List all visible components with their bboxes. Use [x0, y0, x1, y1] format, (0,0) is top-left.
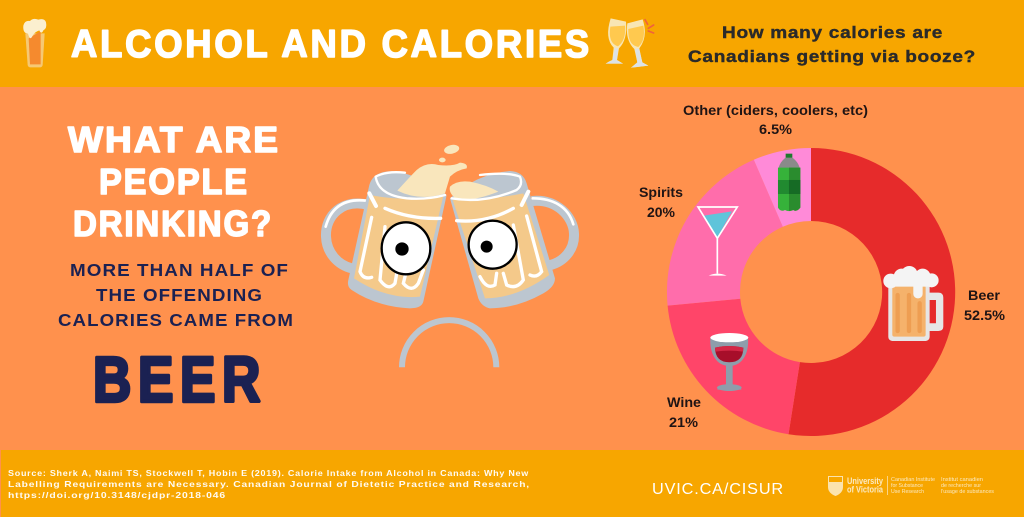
text block: more than half: THE OFFENDING [96, 285, 263, 305]
slice: beer 52.5% [788, 148, 955, 436]
panel: footer band [1, 450, 1024, 517]
logo: University of Victoria [828, 476, 994, 496]
logo: University of Victoria: Use Research [891, 489, 924, 495]
subtitle question: Canadians getting via booze? [688, 48, 976, 66]
label: spirits [639, 184, 683, 220]
icon: martini glass [698, 207, 737, 276]
source citation: Labelling Requirements are Necessary. Canadian Journal of Dietetic Practice and Research, [8, 479, 530, 489]
label: beer: Beer [968, 287, 1001, 303]
panel: header band [0, 0, 1024, 87]
logo: University of Victoria: University [847, 476, 883, 486]
logo: University of Victoria: Canadian Institute [891, 477, 935, 483]
text block: more than half: MORE THAN HALF OF [70, 260, 289, 280]
subtitle question [688, 24, 976, 66]
icon: green bottle [778, 154, 800, 211]
icon: right eye [469, 221, 517, 269]
icon: left mug [326, 143, 467, 308]
slice: spirits 20% [667, 160, 783, 306]
title: ALCOHOL AND CALORIES [71, 23, 592, 66]
chart: donut of calories by drink [639, 102, 1006, 436]
subtitle question: How many calories are [722, 24, 943, 42]
logo: University of Victoria: de recherche sur [941, 483, 981, 489]
heading: what are people drinking [68, 119, 280, 244]
label: other [683, 102, 868, 137]
logo: University of Victoria: of Victoria [847, 484, 884, 494]
logo: University of Victoria: Institut canadien [941, 477, 983, 483]
icon: frown mouth [402, 320, 496, 367]
heading: what are people drinking: WHAT ARE [68, 119, 280, 160]
heading: what are people drinking: DRINKING? [73, 203, 273, 244]
icon: right mug [450, 171, 574, 308]
label: wine [667, 394, 701, 430]
label: wine: Wine [667, 394, 701, 410]
illustration: sad clinking beer mugs face [326, 143, 574, 367]
heading: what are people drinking: PEOPLE [99, 161, 249, 202]
icon: beer glass [23, 19, 46, 67]
label: spirits: 20% [647, 204, 676, 220]
icon: wine glass [710, 333, 748, 391]
icon: beer mug [883, 266, 943, 341]
website link: UVIC.CA/CISUR [652, 481, 784, 498]
source citation: Source: Sherk A, Naimi TS, Stockwell T, Hobin E (2019). Calorie Intake from Alcohol in Canada: Why New [8, 468, 529, 478]
label: beer: 52.5% [964, 307, 1006, 323]
label: spirits: Spirits [639, 184, 683, 200]
source citation: https://doi.org/10.3148/cjdpr-2018-046 [8, 490, 226, 500]
text block: more than half [58, 260, 294, 330]
label: other: 6.5% [759, 121, 793, 137]
logo: University of Victoria: l'usage de substances [941, 489, 994, 495]
logo: University of Victoria: for Substance [891, 483, 923, 489]
label: other: Other (ciders, coolers, etc) [683, 102, 868, 118]
label: beer [964, 287, 1006, 323]
callout: beer: BEER [93, 344, 267, 416]
source citation [8, 468, 530, 500]
slice: other 6.5% [754, 148, 811, 227]
text block: more than half: CALORIES CAME FROM [58, 310, 294, 330]
icon: left eye [382, 222, 430, 274]
icon: champagne glasses [606, 18, 654, 68]
label: wine: 21% [669, 414, 699, 430]
slice: wine 21% [668, 299, 800, 434]
